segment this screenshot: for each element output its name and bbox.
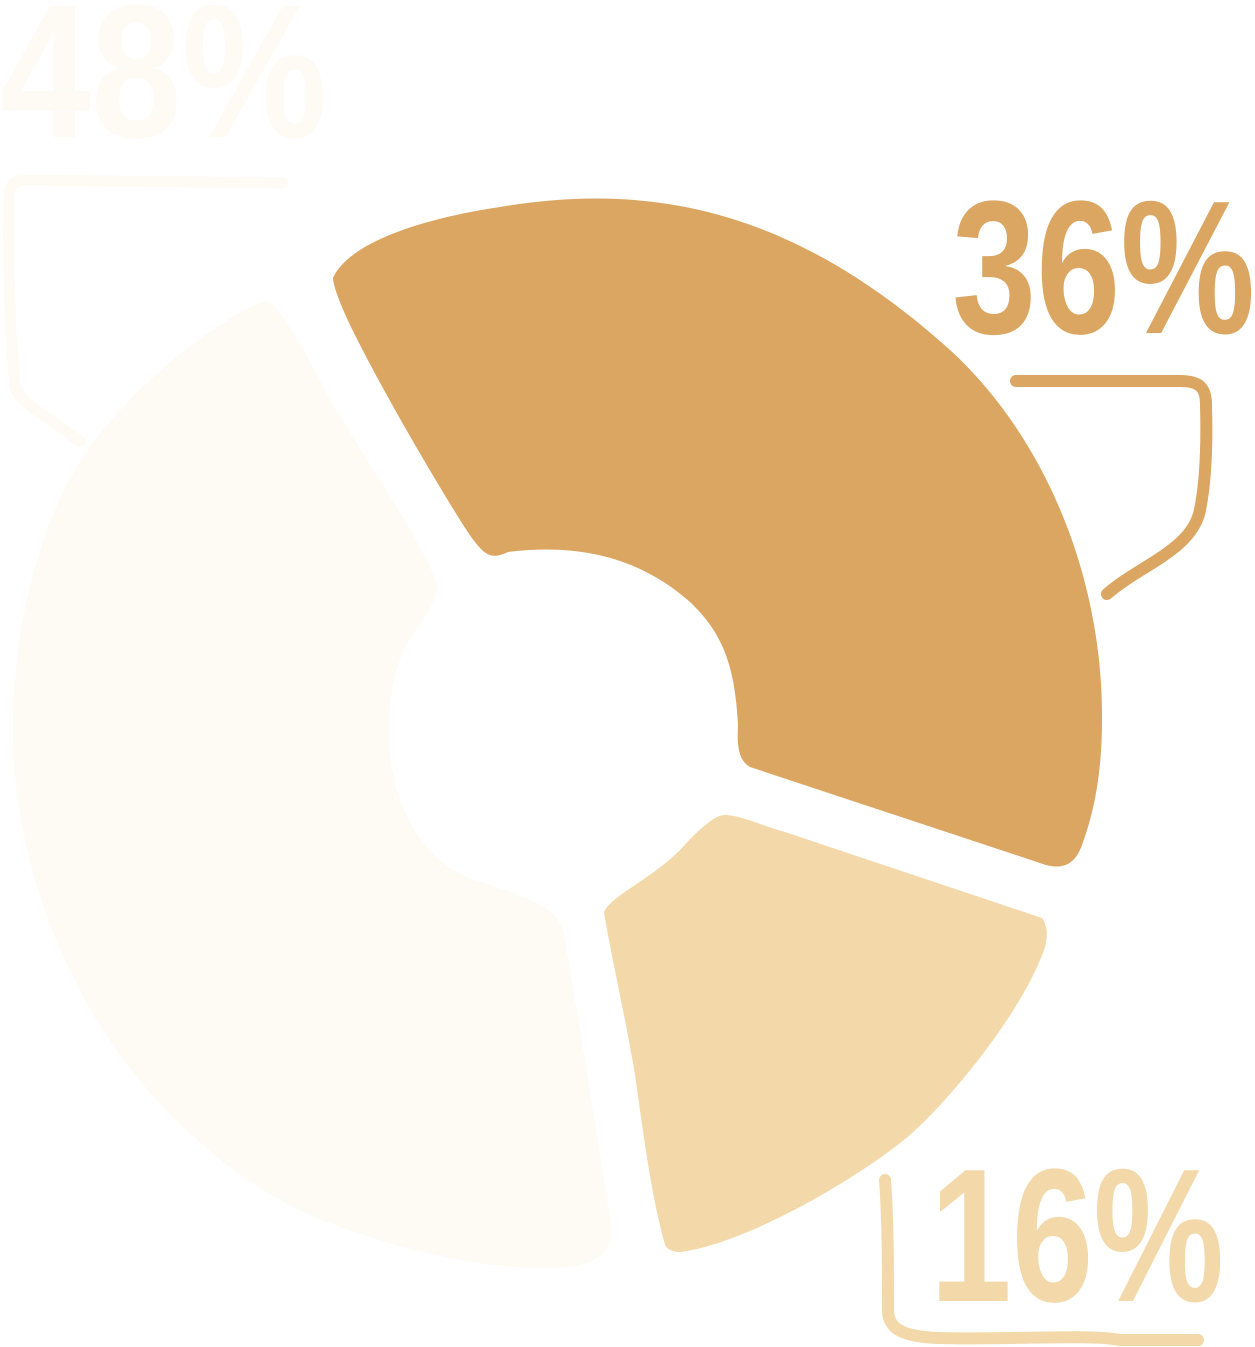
segment: 36% (333, 199, 1102, 867)
segment: 48% (13, 302, 611, 1268)
bracket: 16% leader (885, 1180, 1198, 1340)
segment: 16% (604, 815, 1047, 1252)
bracket: 36% leader (1016, 381, 1206, 594)
bracket: 48% leader (9, 180, 283, 441)
